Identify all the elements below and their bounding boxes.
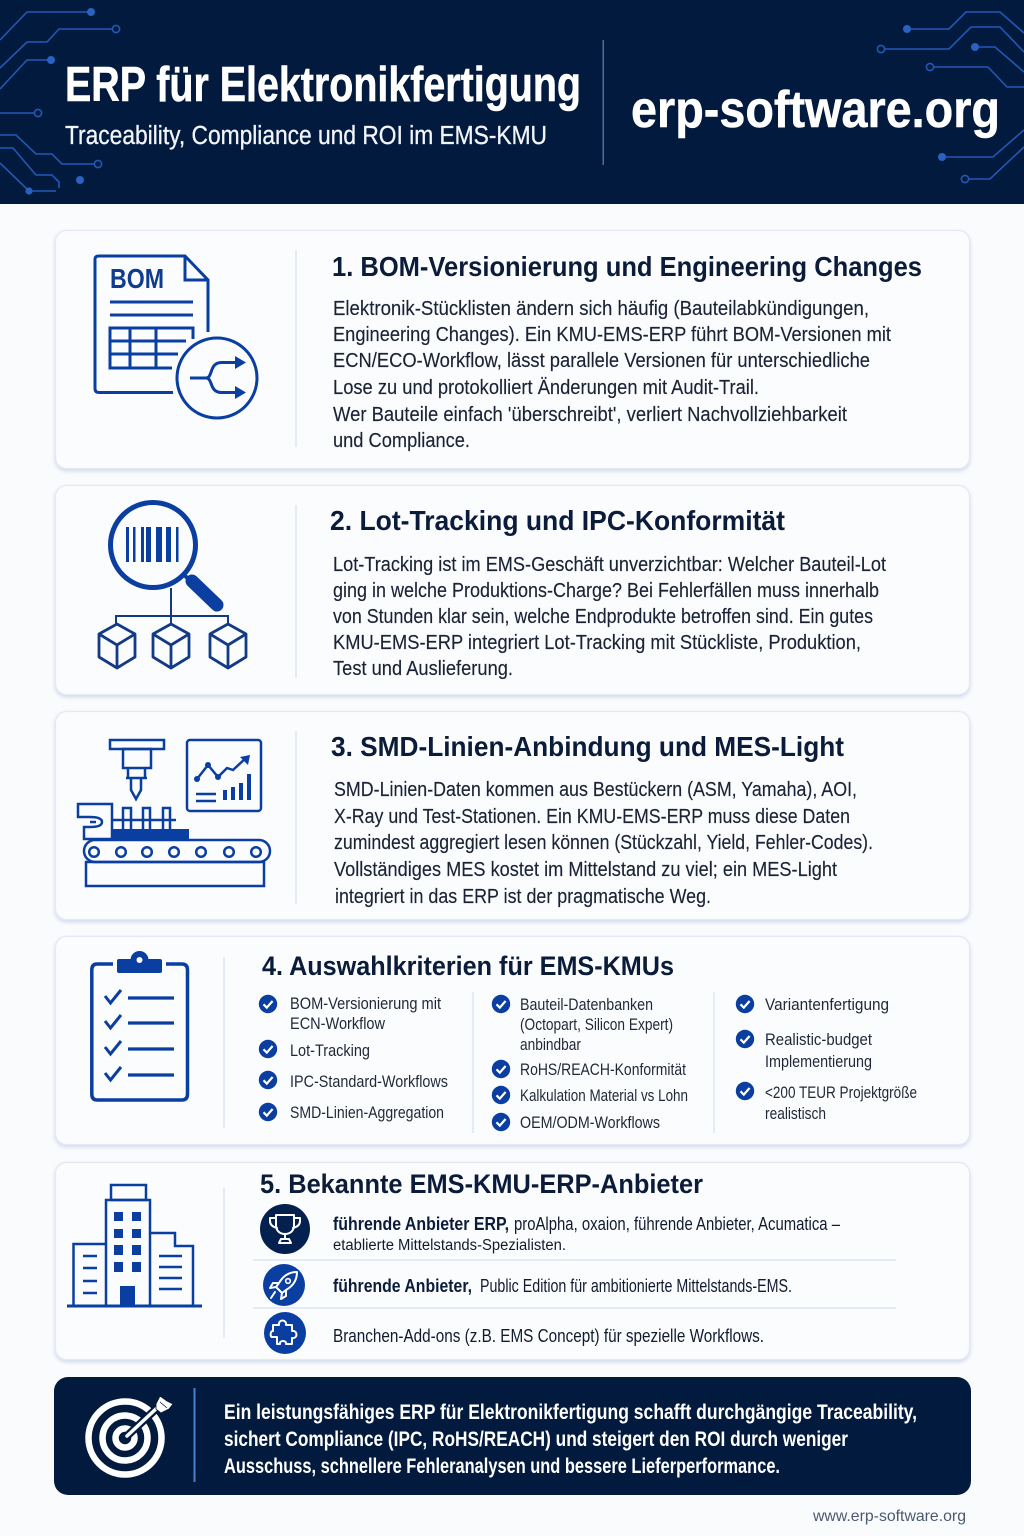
checklist column 3: Implementierung bbox=[765, 1053, 872, 1071]
icon: rocket bbox=[263, 1264, 305, 1306]
summary text: sichert Compliance (IPC, RoHS/REACH) und steigert den ROI durch weniger bbox=[224, 1428, 848, 1451]
panel: BOM-Versionierung bbox=[56, 230, 970, 468]
body text: Vollständiges MES kostet im Mittelstand zu viel; ein MES-Light bbox=[334, 858, 837, 881]
circuit decoration right bbox=[877, 12, 1024, 183]
subtitle: Traceability, Compliance und ROI im EMS-KMU bbox=[65, 122, 547, 150]
body text: Lot-Tracking ist im EMS-Geschäft unverzichtbar: Welcher Bauteil-Lot bbox=[333, 553, 886, 576]
heading: 2. Lot-Tracking und IPC-Konformität bbox=[330, 505, 785, 536]
heading: 4. Auswahlkriterien für EMS-KMUs bbox=[262, 951, 674, 981]
row: etablierte Anbieter: führende Anbieter ERP, bbox=[333, 1213, 509, 1234]
checklist column 2: anbindbar bbox=[520, 1036, 581, 1054]
body text: SMD-Linien-Daten kommen aus Bestückern (ASM, Yamaha), AOI, bbox=[334, 778, 857, 801]
body text: ECN/ECO-Workflow, lässt parallele Versionen für unterschiedliche bbox=[333, 349, 870, 372]
panel: SMD-Linien bbox=[56, 712, 970, 920]
row: ambitionierte Mittelstands-EMS: führende Anbieter, bbox=[333, 1275, 472, 1296]
checklist column 1: Lot-Tracking bbox=[290, 1042, 370, 1060]
body text: Engineering Changes). Ein KMU-EMS-ERP führt BOM-Versionen mit bbox=[333, 323, 891, 346]
icon: magnifier with barcode and lots bbox=[99, 502, 246, 668]
checklist column 2 bbox=[492, 995, 688, 1132]
header divider bbox=[602, 40, 604, 165]
panel: Auswahlkriterien bbox=[56, 936, 970, 1144]
callout: Fazit bbox=[54, 1377, 971, 1495]
icon: BOM document with branching versions bbox=[95, 256, 257, 418]
heading: 1. BOM-Versionierung und Engineering Changes bbox=[332, 251, 922, 282]
summary text: Ausschuss, schnellere Fehleranalysen und bessere Lieferperformance. bbox=[224, 1455, 780, 1478]
heading: 3. SMD-Linien-Anbindung und MES-Light bbox=[331, 731, 844, 762]
body text: von Stunden klar sein, welche Endprodukte betroffen sind. Ein gutes bbox=[333, 605, 873, 628]
body text: Test und Auslieferung. bbox=[333, 657, 513, 680]
body text bbox=[333, 297, 891, 452]
checklist column 2: Kalkulation Material vs Lohn bbox=[520, 1087, 688, 1105]
panel: Lot-Tracking bbox=[56, 486, 970, 694]
body text: Wer Bauteile einfach 'überschreibt', verliert Nachvollziehbarkeit bbox=[333, 403, 847, 426]
icon: puzzle piece bbox=[264, 1312, 306, 1354]
checklist column 1: ECN-Workflow bbox=[290, 1015, 385, 1033]
checklist column 1: SMD-Linien-Aggregation bbox=[290, 1104, 444, 1122]
checklist column 2: Bauteil-Datenbanken bbox=[520, 996, 653, 1014]
checklist column 3: Variantenfertigung bbox=[765, 996, 889, 1014]
panel: Anbieter bbox=[56, 1162, 970, 1360]
checklist column 3: Realistic-budget bbox=[765, 1031, 872, 1049]
heading: 5. Bekannte EMS-KMU-ERP-Anbieter bbox=[260, 1169, 703, 1199]
icon: trophy bbox=[260, 1204, 310, 1254]
body text: Lose zu und protokolliert Änderungen mit Audit-Trail. bbox=[333, 376, 759, 399]
checklist column 1: BOM-Versionierung mit bbox=[290, 995, 441, 1013]
body text: X-Ray und Test-Stationen. Ein KMU-EMS-ERP muss diese Daten bbox=[334, 805, 850, 828]
checklist column 2: (Octopart, Silicon Expert) bbox=[520, 1016, 673, 1034]
checklist column 2: RoHS/REACH-Konformität bbox=[520, 1061, 686, 1079]
checklist column 1 bbox=[259, 995, 448, 1122]
summary text bbox=[224, 1401, 917, 1478]
body text: integriert in das ERP ist der pragmatische Weg. bbox=[335, 885, 711, 908]
row: etablierte Anbieter: etablierte Mittelstands-Spezialisten. bbox=[333, 1237, 566, 1254]
header banner bbox=[0, 0, 1024, 204]
footer url: www.erp-software.org bbox=[812, 1508, 966, 1525]
icon: pick and place line with dashboard bbox=[78, 740, 270, 886]
row: Branchen-Add-ons: Branchen-Add-ons (z.B. EMS Concept) für spezielle Workflows. bbox=[333, 1326, 764, 1346]
checklist column 1: IPC-Standard-Workflows bbox=[290, 1073, 448, 1091]
checklist column 3 bbox=[736, 995, 917, 1123]
icon: target with arrow bbox=[88, 1396, 173, 1474]
circuit decoration left bbox=[0, 8, 120, 195]
row: ambitionierte Mittelstands-EMS: Public Edition für ambitionierte Mittelstands-EMS. bbox=[480, 1276, 792, 1296]
body text: ging in welche Produktions-Charge? Bei Fehlerfällen muss innerhalb bbox=[333, 579, 879, 602]
body text bbox=[334, 778, 873, 908]
icon: BOM document with branching versions: BOM bbox=[110, 263, 164, 294]
checklist column 3: <200 TEUR Projektgröße bbox=[765, 1084, 917, 1102]
row: ambitionierte Mittelstands-EMS bbox=[263, 1264, 792, 1306]
icon: clipboard checklist bbox=[92, 951, 188, 1100]
row: etablierte Anbieter: proAlpha, oxaion, führende Anbieter, Acumatica – bbox=[514, 1214, 840, 1234]
checklist column 2: OEM/ODM-Workflows bbox=[520, 1114, 660, 1132]
body text: KMU-EMS-ERP integriert Lot-Tracking mit Stückliste, Produktion, bbox=[333, 631, 861, 654]
title: ERP für Elektronikfertigung bbox=[65, 58, 581, 112]
checklist column 3: realistisch bbox=[765, 1105, 826, 1123]
body text: zumindest aggregiert lesen können (Stückzahl, Yield, Fehler-Codes). bbox=[334, 831, 873, 854]
body text bbox=[333, 553, 886, 680]
icon: office buildings bbox=[67, 1185, 202, 1306]
body text: und Compliance. bbox=[333, 429, 470, 452]
body text: Elektronik-Stücklisten ändern sich häufig (Bauteilabkündigungen, bbox=[333, 297, 869, 320]
row: Branchen-Add-ons bbox=[264, 1312, 764, 1354]
row: etablierte Anbieter bbox=[260, 1204, 840, 1254]
